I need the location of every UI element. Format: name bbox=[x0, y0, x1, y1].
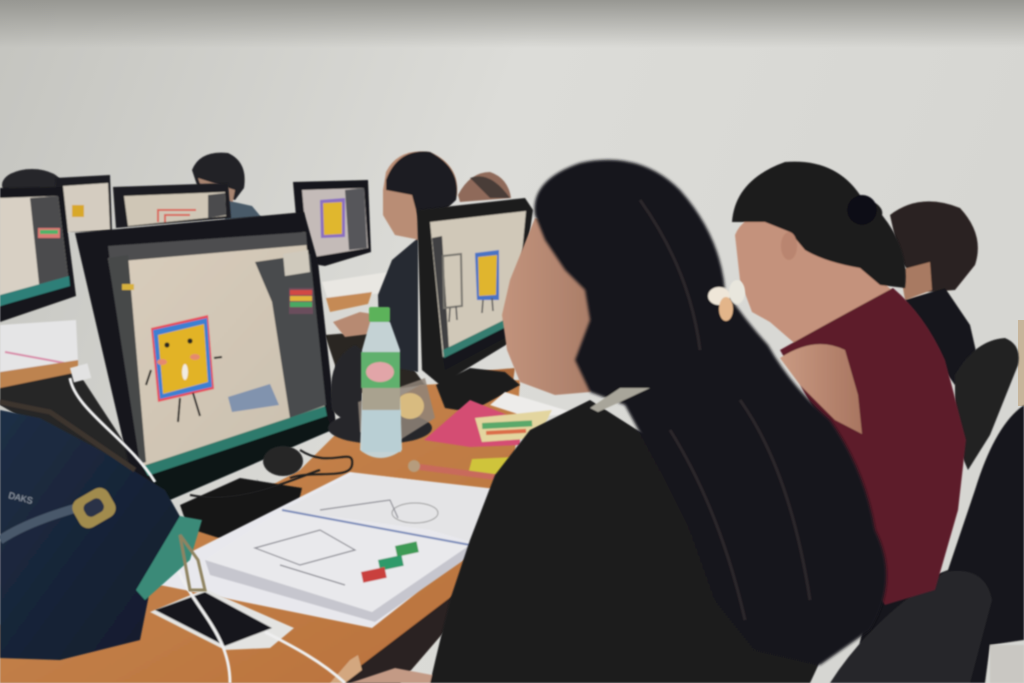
hair bbox=[535, 160, 886, 665]
maroon blouse bbox=[780, 288, 966, 605]
face bbox=[502, 218, 610, 395]
smartphone and white charging cable bbox=[70, 363, 345, 683]
ear bbox=[590, 298, 618, 345]
water bottle bbox=[360, 307, 402, 458]
person: woman in maroon top bbox=[732, 162, 966, 605]
monitor: main front: DELL bbox=[239, 476, 264, 494]
navy handbag: DAKS bbox=[8, 490, 34, 506]
navy handbag bbox=[0, 402, 205, 660]
monitor: far back bbox=[55, 175, 112, 232]
pink folder and papers bbox=[408, 392, 575, 478]
chair: front bbox=[830, 571, 992, 683]
background desk bbox=[0, 272, 425, 505]
monitor stand and cables bbox=[180, 446, 352, 540]
person: man with glasses bbox=[333, 151, 457, 372]
person: boy in back right bbox=[890, 201, 978, 385]
icon: grey shape on screen bbox=[228, 384, 279, 412]
headphones on desk bbox=[328, 345, 432, 444]
face and neck bbox=[735, 214, 892, 348]
person: back man bbox=[192, 153, 262, 220]
left monitors bbox=[0, 175, 371, 322]
hand bbox=[350, 668, 432, 683]
background people bbox=[2, 151, 511, 372]
monitor: back centre-left bbox=[113, 183, 231, 228]
monitor: centre right bbox=[417, 198, 533, 412]
monitor: back centre bbox=[293, 180, 371, 266]
office chairs bbox=[830, 338, 1024, 683]
monitor: main front bbox=[75, 212, 336, 503]
hair bbox=[732, 162, 906, 288]
open workbook bbox=[155, 472, 498, 628]
person: far left hair bbox=[2, 169, 62, 201]
collar detail bbox=[590, 388, 650, 412]
black shirt bbox=[430, 400, 830, 683]
chair: middle bbox=[850, 405, 1024, 683]
hair clip bbox=[708, 280, 745, 321]
chair: upper bbox=[955, 338, 1019, 470]
snack bowl bbox=[358, 378, 435, 440]
arm bbox=[780, 344, 862, 434]
person: main woman bbox=[350, 160, 886, 683]
icon: yellow character on screen bbox=[146, 315, 222, 422]
person: bald man bbox=[458, 172, 511, 202]
monitor: left edge bbox=[0, 187, 76, 322]
main desk bbox=[0, 368, 520, 683]
